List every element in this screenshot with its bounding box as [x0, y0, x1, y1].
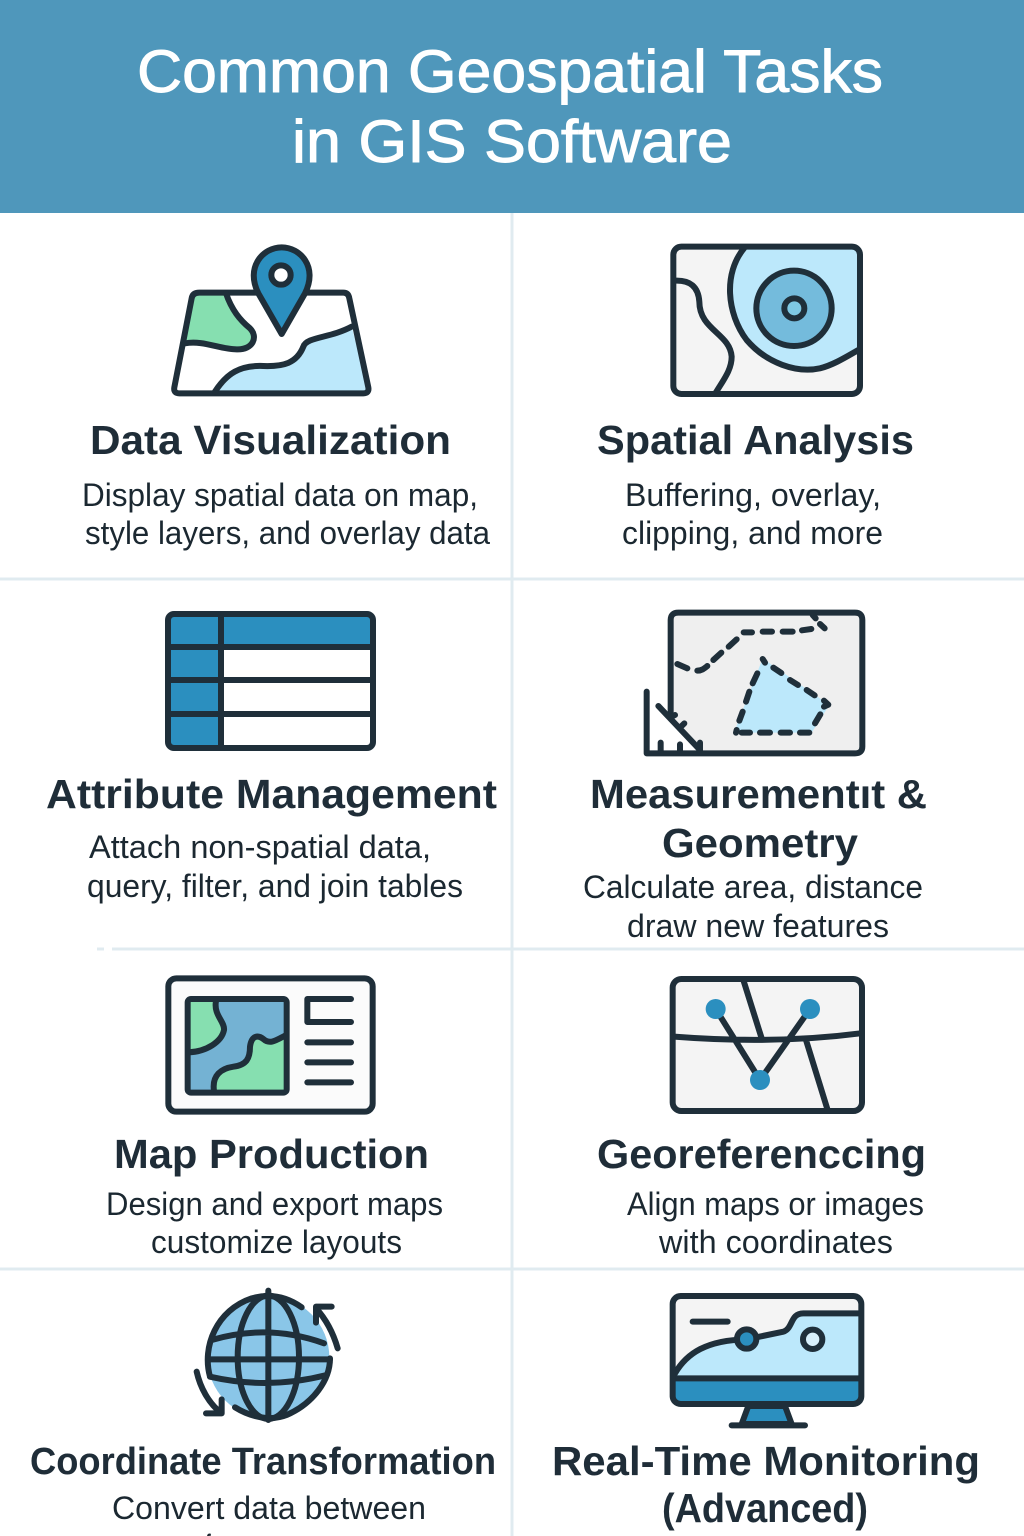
description: Convert data between	[112, 1490, 426, 1526]
description: Attach non-spatial data,	[89, 829, 431, 865]
description: style layers, and overlay data	[85, 515, 490, 551]
description: Display spatial data on map,	[82, 477, 478, 513]
panel: spatial analysis	[597, 247, 914, 551]
description: Design and export maps	[106, 1186, 443, 1222]
heading: Attribute Management	[46, 771, 497, 817]
description	[583, 869, 923, 944]
description	[87, 829, 463, 904]
panel: measurement and geometry	[583, 613, 927, 944]
heading: Real-Time Monitoring	[552, 1438, 980, 1484]
description: with coordinates	[658, 1224, 893, 1260]
heading: Map Production	[114, 1131, 429, 1177]
heading: Geometry	[662, 820, 858, 866]
heading: Measurementıt &	[590, 771, 927, 817]
description: draw new features	[627, 908, 889, 944]
title: in GIS Software	[292, 108, 732, 175]
description: Align maps or images	[627, 1186, 924, 1222]
description	[106, 1186, 443, 1260]
panel: coordinate transformation	[30, 1291, 496, 1536]
icon: globe with rotation arrows	[197, 1291, 338, 1420]
icon: ruler and dashed polygon	[647, 613, 862, 753]
heading: Georeferenccing	[597, 1131, 926, 1177]
title: Common Geospatial Tasks	[137, 38, 883, 105]
title	[137, 38, 883, 175]
description	[82, 477, 490, 551]
icon: map with location pin	[174, 247, 368, 393]
icon: buffer rings	[673, 247, 860, 394]
heading	[552, 1438, 980, 1531]
panel: map production	[106, 978, 443, 1260]
icon: monitor with live map	[673, 1296, 861, 1425]
description: customize layouts	[151, 1224, 402, 1260]
description	[622, 477, 883, 551]
heading	[590, 771, 927, 866]
panel: real-time monitoring	[552, 1296, 980, 1531]
heading: (Advanced)	[662, 1485, 868, 1531]
heading: Data Visualization	[90, 417, 451, 463]
description: clipping, and more	[622, 515, 883, 551]
description: Buffering, overlay,	[625, 477, 881, 513]
panel: attribute management	[46, 614, 497, 904]
header banner	[0, 0, 1024, 213]
icon: map layout	[168, 978, 373, 1112]
description: query, filter, and join tables	[87, 868, 463, 904]
panel: georeferencing	[597, 979, 926, 1260]
icon: control points on map	[673, 979, 862, 1111]
heading: Coordinate Transformation	[30, 1441, 496, 1483]
description	[627, 1186, 924, 1260]
description: Calculate area, distance	[583, 869, 923, 905]
icon: attribute table	[168, 614, 373, 748]
panel: data visualization	[82, 247, 490, 551]
heading: Spatial Analysis	[597, 417, 914, 463]
